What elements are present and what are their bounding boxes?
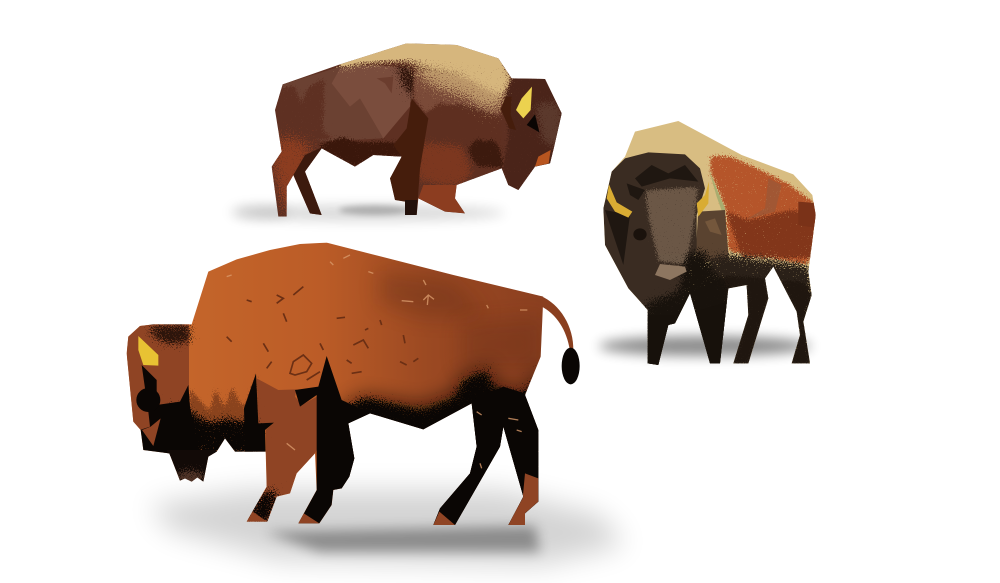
hind rust — [270, 132, 323, 218]
eye — [527, 114, 539, 132]
bison: top, walking right — [272, 43, 562, 217]
base coat — [272, 43, 562, 217]
rump shade — [283, 65, 413, 142]
shoulder fringe — [387, 63, 417, 98]
horn right — [697, 182, 709, 217]
front black leg — [295, 356, 370, 523]
rear inner leg — [293, 147, 323, 217]
body underside stipple — [332, 359, 538, 525]
leg dark right — [695, 302, 728, 363]
shadow: large bison — [150, 490, 625, 565]
foreleg rust solid — [418, 185, 465, 213]
eye — [633, 228, 647, 240]
eye — [136, 388, 160, 412]
beard lower — [175, 470, 205, 488]
front hoof — [298, 513, 319, 523]
rust grey marks — [745, 178, 782, 220]
body underside soft — [330, 358, 538, 525]
shadow: top bison — [230, 205, 505, 221]
cracks dark — [227, 287, 418, 380]
neck — [695, 210, 729, 262]
body dark solid — [690, 267, 812, 363]
hind legs — [433, 387, 538, 525]
forehead dark mark lower — [627, 183, 645, 200]
leg dark left — [648, 315, 675, 365]
chin shade — [645, 250, 728, 382]
muzzle — [655, 264, 687, 280]
forehead dark mark — [635, 165, 698, 187]
shadow: right bison — [599, 336, 811, 356]
bison: large, bottom left — [126, 242, 580, 525]
cracks light — [227, 255, 527, 468]
chest — [420, 102, 503, 185]
horn — [138, 336, 158, 366]
haunch shading — [460, 317, 543, 370]
haunch dark — [798, 202, 818, 228]
back shading — [380, 270, 487, 317]
bison: right, facing viewer — [585, 115, 825, 382]
foot dark — [405, 200, 417, 215]
head — [502, 75, 577, 195]
tail — [541, 296, 573, 351]
face black — [140, 365, 200, 460]
rust patch — [710, 155, 818, 265]
nose patch — [142, 418, 161, 446]
foreleg — [247, 378, 320, 522]
foreleg hoof — [247, 512, 267, 522]
midbody light band — [413, 70, 508, 117]
mane spikes — [189, 373, 258, 430]
head stipple — [533, 102, 567, 148]
illustration: three bison — [126, 43, 816, 576]
hind hoof and shin — [508, 473, 538, 525]
black spike — [244, 373, 274, 453]
tan base — [585, 115, 825, 375]
nose bridge — [645, 187, 698, 265]
head — [603, 152, 705, 365]
tail tuft — [562, 348, 580, 384]
hind stripes — [280, 77, 338, 142]
horn left — [607, 184, 632, 218]
head top shading — [145, 324, 192, 345]
head mark — [501, 97, 516, 130]
body fur — [126, 242, 544, 525]
tan mane — [337, 40, 513, 98]
cheek dark mark — [605, 210, 630, 265]
tan top solid — [340, 43, 503, 68]
chest dark patch — [467, 137, 505, 168]
dark rust band — [725, 210, 818, 258]
face — [120, 323, 189, 430]
central dark leg — [390, 98, 428, 215]
lower body stipple — [645, 253, 818, 382]
green sliver — [709, 170, 725, 220]
base coat — [120, 230, 553, 530]
beard base — [168, 450, 217, 482]
flank inner mark — [377, 77, 393, 93]
neck light marks — [705, 218, 722, 235]
neck black stipple — [167, 403, 258, 457]
chest rust stipple — [417, 142, 473, 188]
horn — [516, 87, 532, 118]
foreleg lower shading — [243, 487, 280, 523]
tan mane sparse — [403, 55, 510, 118]
muzzle — [535, 150, 551, 167]
hoof — [433, 512, 455, 525]
flank highlight — [332, 65, 410, 138]
belly — [317, 137, 413, 168]
